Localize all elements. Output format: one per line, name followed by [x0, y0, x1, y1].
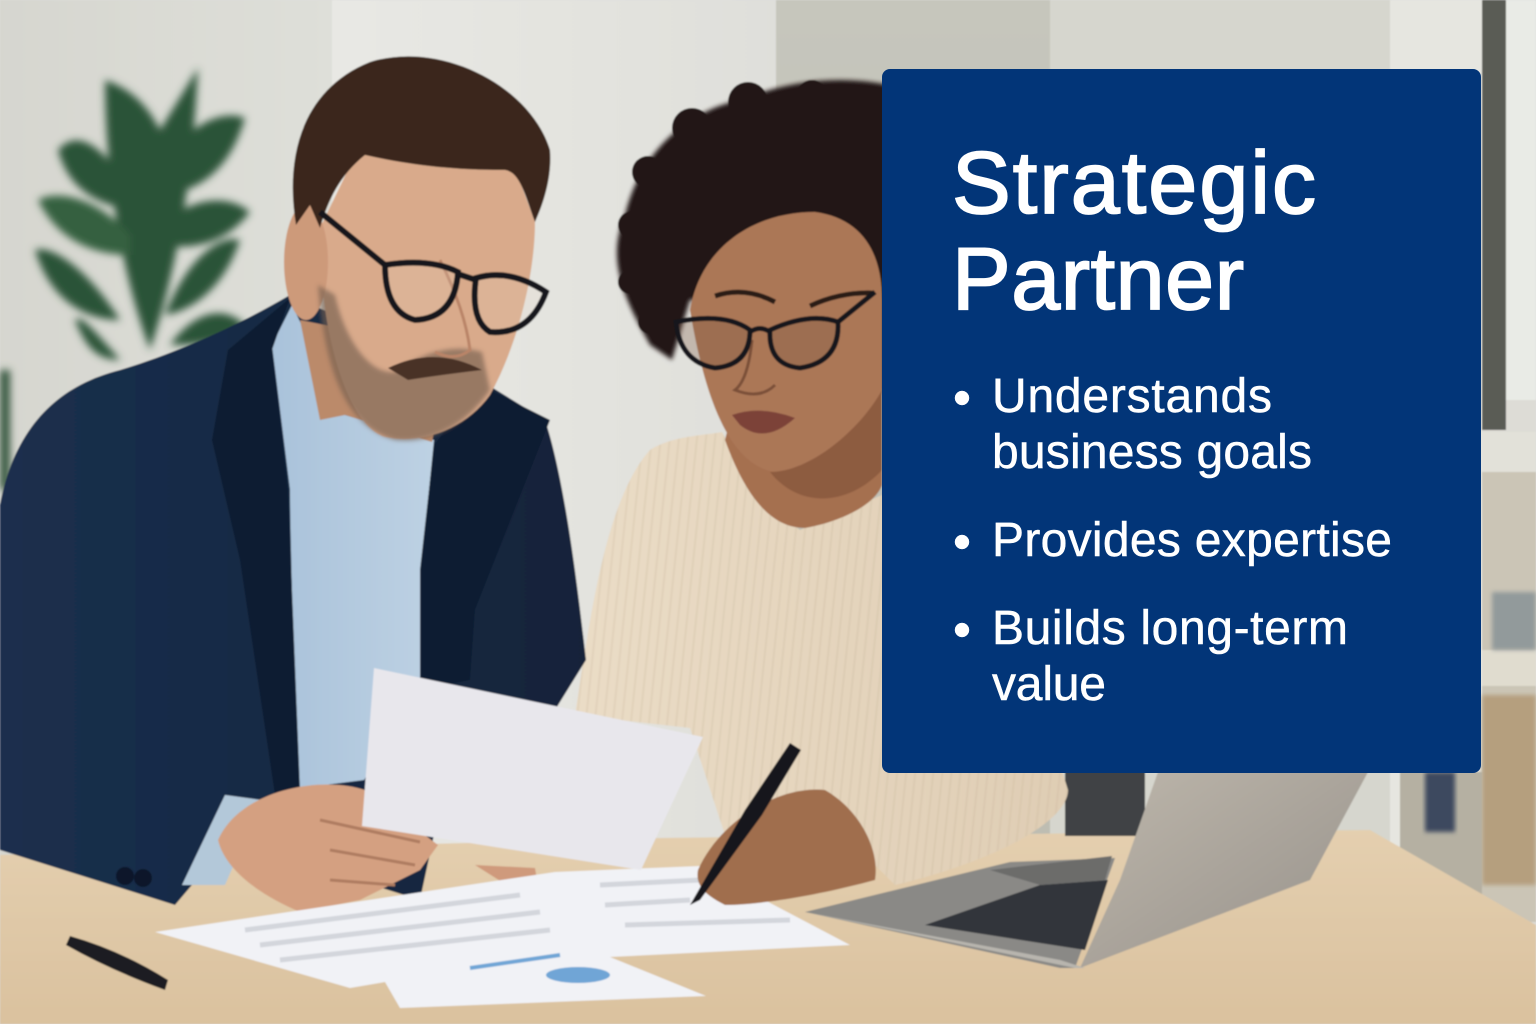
bullet list: Understands: [992, 370, 1272, 423]
man: lapels: [212, 298, 550, 795]
laptop: [805, 772, 1368, 968]
woman: glasses: [676, 292, 875, 368]
heading: [952, 133, 1316, 328]
plant: [0, 68, 250, 490]
woman: neck and face: [690, 212, 882, 528]
bullet list: [955, 370, 1392, 711]
man: glasses: [320, 212, 546, 332]
man: jacket: [0, 295, 586, 905]
bullet list: Provides expertise: [992, 514, 1392, 567]
heading: Strategic: [952, 133, 1316, 232]
desk: [0, 830, 1536, 1024]
man: hair: [293, 56, 550, 228]
documents on desk: [155, 866, 850, 1008]
bullet list: Builds long-term: [992, 602, 1348, 655]
bullet list: business goals: [992, 426, 1312, 479]
panel background: [882, 69, 1481, 773]
man: cuff: [182, 795, 262, 885]
heading: Partner: [952, 229, 1244, 328]
woman: hair: [617, 80, 890, 392]
chair behind laptop: [1065, 770, 1145, 836]
man: neck and face: [284, 145, 535, 442]
pen on desk: [66, 936, 168, 990]
man: shirt: [272, 305, 434, 790]
woman: sweater: [575, 432, 1068, 885]
woman: writing hand and pen: [690, 743, 876, 905]
bullet list: value: [992, 658, 1106, 711]
man: hand holding paper: [218, 784, 538, 912]
jacket buttons: [116, 867, 152, 887]
paper held by man: [362, 668, 703, 870]
